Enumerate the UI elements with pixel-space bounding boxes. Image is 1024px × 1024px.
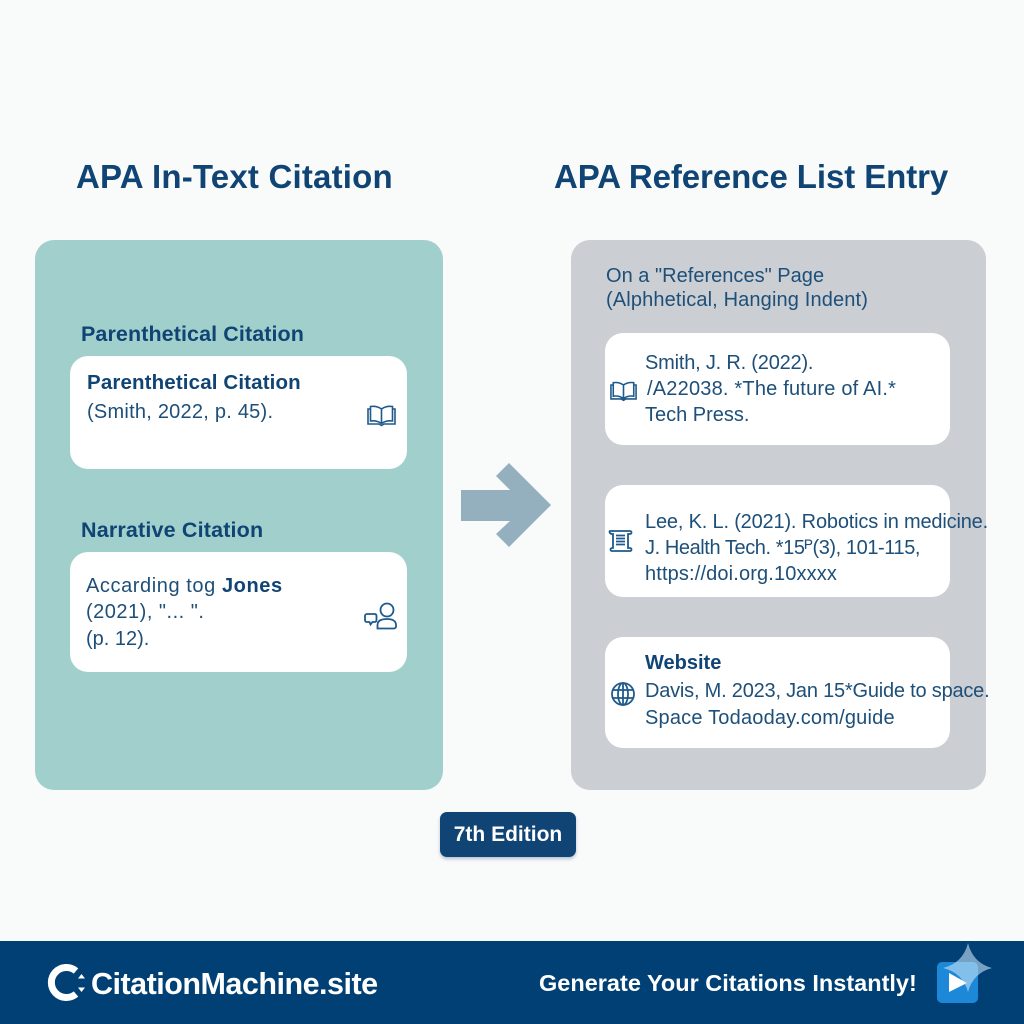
reference text	[645, 652, 989, 729]
reference text: Tech Press.	[645, 404, 749, 426]
card text	[86, 575, 283, 650]
panel intro text: On a "References" Page	[606, 265, 824, 287]
icon: open book	[610, 382, 637, 402]
panel: in-text citation	[35, 240, 443, 790]
card heading: Parenthetical Citation	[87, 371, 301, 394]
arrow: in-text to reference	[461, 463, 551, 547]
reference text: J. Health Tech. *15ᴾ(3), 101-115,	[645, 537, 920, 559]
icon: open book	[367, 406, 396, 426]
reference text	[645, 352, 896, 426]
title: reference list entry: APA Reference List Entry	[554, 158, 948, 195]
card text: Accarding tog Jones	[86, 575, 283, 597]
tagline: Generate Your Citations Instantly!	[539, 970, 917, 996]
panel: reference list entry	[571, 240, 986, 790]
reference text: Lee, K. L. (2021). Robotics in medicine.	[645, 511, 988, 533]
icon: globe	[611, 682, 635, 706]
reference text	[645, 511, 988, 585]
card: book reference	[605, 333, 950, 445]
reference text: Space Todaoday.com/guide	[645, 707, 895, 729]
reference text: Smith, J. R. (2022).	[645, 352, 813, 374]
reference text: /A22038. *The future of AI.*	[647, 378, 896, 400]
footer band	[0, 941, 1024, 1024]
card: journal reference	[605, 485, 950, 597]
heading: parenthetical citation: Parenthetical Citation	[81, 322, 304, 346]
icon: play button with sparkle	[937, 943, 992, 1003]
card: parenthetical citation	[70, 356, 407, 469]
logo text: CitationMachine.site	[91, 967, 378, 1001]
card text: (Smith, 2022, p. 45).	[87, 401, 273, 423]
panel intro text	[606, 265, 868, 311]
title: in-text citation: APA In-Text Citation	[76, 158, 393, 195]
badge: 7th edition	[440, 812, 576, 857]
card text: (2021), "... ".	[86, 601, 204, 623]
reference text: Website	[645, 652, 721, 674]
icon: speech bubble and person	[364, 602, 397, 630]
reference text: Davis, M. 2023, Jan 15*Guide to space.	[645, 680, 989, 702]
card: website reference	[605, 637, 950, 748]
heading: narrative citation: Narrative Citation	[81, 518, 263, 542]
panel intro text: (Alphhetical, Hanging Indent)	[606, 289, 868, 311]
reference text: https://doi.org.10xxxx	[645, 563, 837, 585]
card text: (p. 12).	[86, 628, 149, 650]
logo icon	[48, 964, 85, 1001]
card: narrative citation	[70, 552, 407, 672]
icon: scroll	[608, 530, 632, 552]
badge: 7th edition: 7th Edition	[454, 823, 562, 846]
